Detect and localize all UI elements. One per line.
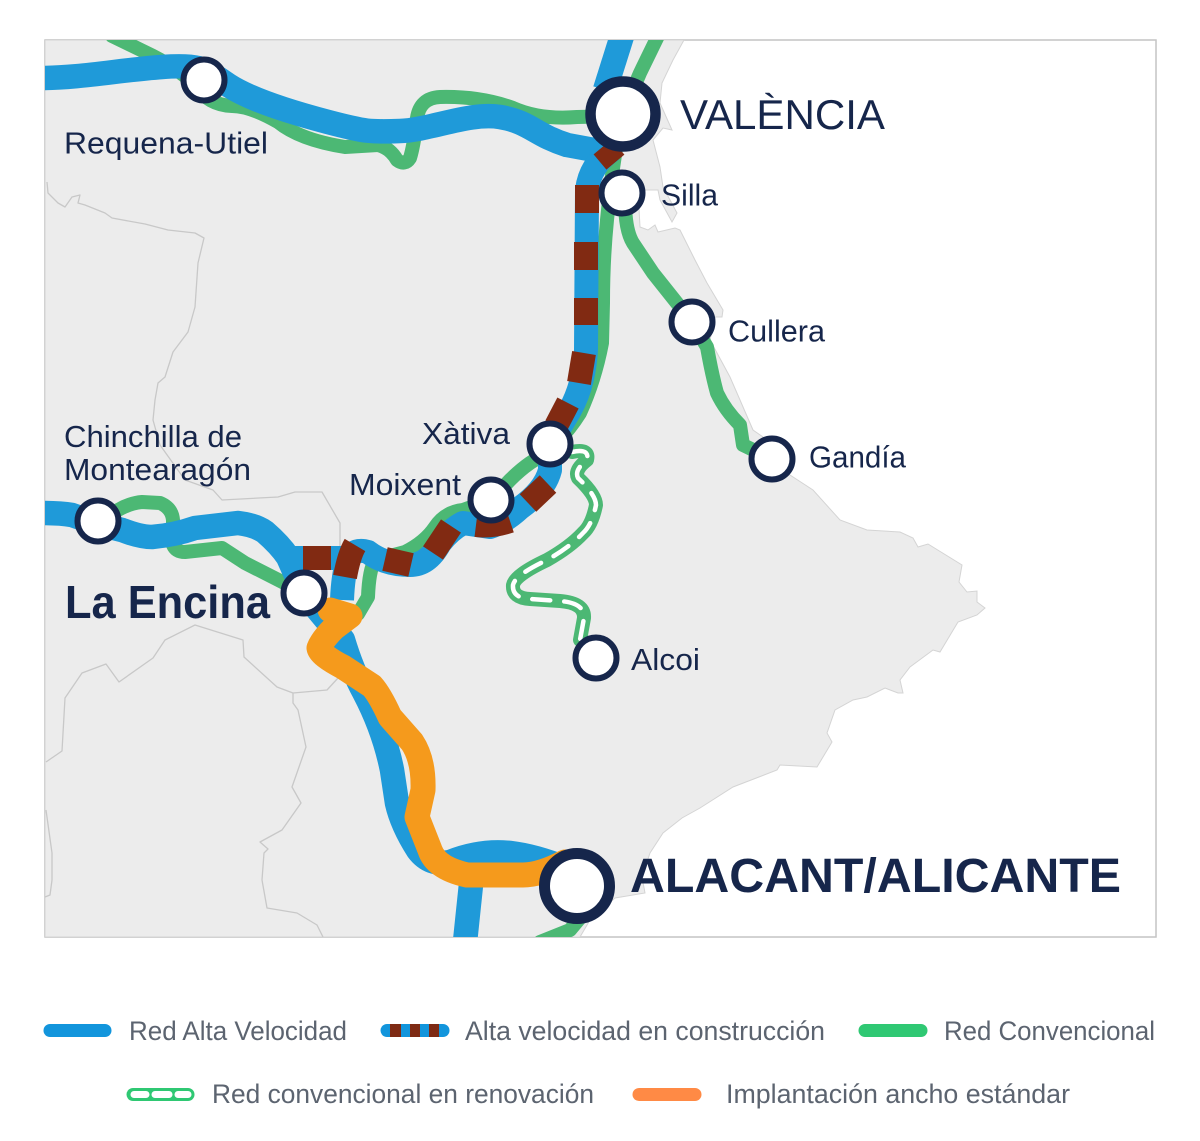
label: Chinchilla de Montearagón [64,419,251,487]
station: València [590,82,656,146]
station: Cullera [672,302,712,342]
legend item: Red convencional en renovación: Red convencional en renovación [212,1079,594,1109]
legend item: Implantación ancho estándar: Implantación ancho estándar [726,1079,1070,1109]
label: Alacant/Alicante: ALACANT/ALICANTE [630,850,1121,903]
label: Chinchilla de Montearagón: Montearagón [64,452,251,487]
label: Alcoi: Alcoi [631,642,700,677]
label: Moixent: Moixent [349,467,461,502]
label: Xàtiva: Xàtiva [422,416,511,451]
line: red alta velocidad [40,36,622,942]
station: Xàtiva [530,424,570,464]
label: Chinchilla de Montearagón: Chinchilla de [64,419,242,454]
label: Silla: Silla [661,178,719,212]
province boundaries [45,182,340,937]
station: Gandía [752,438,792,480]
label: Gandía: Gandía [809,440,907,474]
legend item: Alta velocidad en construcción: Alta velocidad en construcción [465,1016,825,1046]
line: red convencional [98,36,772,942]
station: La Encina [284,572,324,614]
legend item: Red Convencional: Red Convencional [944,1016,1155,1046]
label: València: VALÈNCIA [680,91,885,138]
map panel [40,36,1156,942]
line: alta velocidad en construcción [288,147,618,600]
label: Requena-Utiel: Requena-Utiel [64,126,268,160]
station: Silla [602,172,642,214]
land mass [45,40,985,937]
legend [50,1016,1155,1109]
station: Requena-Utiel [184,60,224,100]
label: La Encina: La Encina [65,576,270,628]
station: Chinchilla de Montearagón [78,500,118,542]
station: Moixent [470,480,512,520]
legend item: Red Alta Velocidad: Red Alta Velocidad [129,1016,347,1046]
label: Cullera: Cullera [728,314,826,348]
station: Alcoi [576,638,616,678]
station: Alacant/Alicante [544,854,610,918]
line: implantación ancho estándar [319,610,565,875]
line: red convencional en renovación [513,451,596,640]
